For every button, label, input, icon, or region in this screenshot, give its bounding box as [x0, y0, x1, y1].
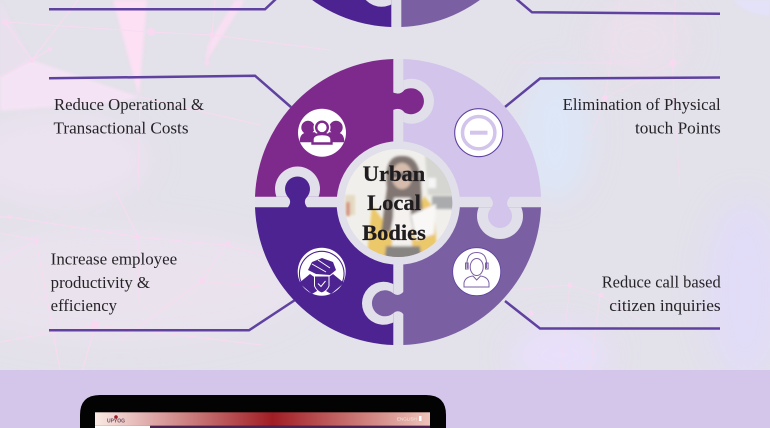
text: bottom left: [51, 250, 177, 315]
previous puzzle circle cropped at top: [253, 0, 539, 27]
connector lines: [49, 0, 720, 330]
text: bottom left: productivity &: [51, 273, 150, 292]
text: top right: touch Points: [635, 118, 721, 138]
text: top right: [563, 95, 721, 138]
center photo and title: [337, 141, 460, 265]
tablet screen header: UPYOG: [107, 418, 125, 424]
icon: handshake shield: [298, 248, 346, 296]
center photo and title: Urban: [363, 161, 426, 186]
icon: no touch minus: [455, 109, 503, 157]
center photo and title: Bodies: [362, 220, 426, 245]
text: top left: [54, 95, 204, 138]
puzzle diagram: [255, 59, 541, 345]
icon: people group: [298, 109, 346, 157]
text: bottom right: [602, 273, 721, 315]
text: bottom right: Reduce call based: [602, 273, 721, 292]
icon: call agent: [453, 248, 501, 296]
tablet screen header: [95, 412, 430, 426]
text: bottom left: Increase employee: [51, 250, 177, 269]
text: top right: Elimination of Physical: [563, 95, 721, 114]
center photo and title: Local: [367, 190, 421, 215]
tablet screen header: ENGLISH: [397, 416, 417, 422]
lower panel: [0, 370, 770, 428]
text: bottom left: efficiency: [51, 296, 118, 315]
tablet mockup: [80, 395, 446, 428]
text: bottom right: citizen inquiries: [609, 296, 721, 315]
text: top left: Transactional Costs: [54, 118, 188, 138]
text: top left: Reduce Operational &: [54, 95, 204, 114]
